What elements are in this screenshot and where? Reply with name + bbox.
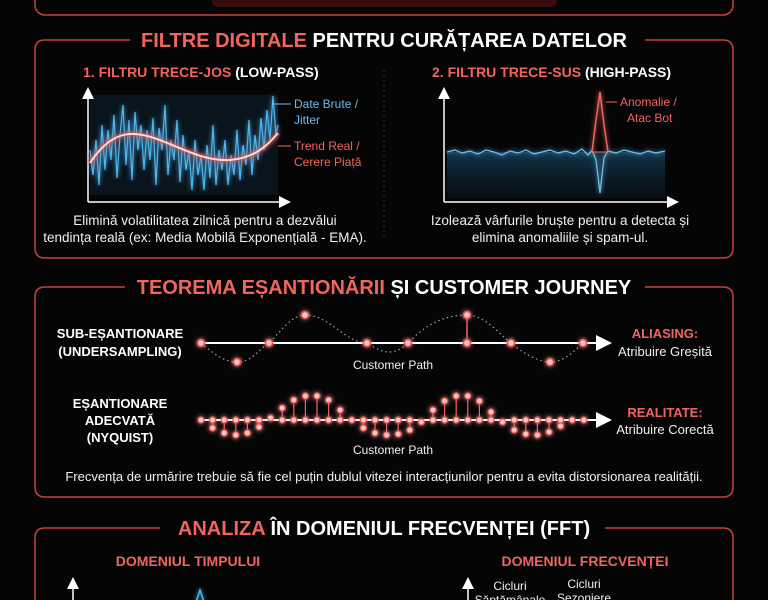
- chart: low-pass: Cerere Piață: [294, 155, 362, 169]
- heading: filters: FILTRE DIGITALE PENTRU CURĂȚAREA DATELOR: [141, 29, 628, 52]
- panel: sampling theorem: Atribuire Greșită: [618, 344, 713, 359]
- diagram: undersampling: Customer Path: [353, 358, 433, 372]
- chart: frequency domain (cropped): Cicluri: [493, 579, 527, 593]
- chart: high-pass: Anomalie /: [620, 95, 677, 109]
- label: nyquist: EȘANTIONARE: [73, 396, 168, 411]
- caption: low-pass: Elimină volatilitatea zilnică pentru a dezvălui: [73, 213, 337, 228]
- subheading: frequency domain: DOMENIUL FRECVENȚEI: [502, 553, 668, 569]
- callout: aliasing: ALIASING:: [632, 326, 698, 341]
- panel: sampling theorem: (NYQUIST): [87, 430, 153, 445]
- callout: reality: REALITATE:: [627, 405, 703, 420]
- panel: digital filters: [35, 29, 733, 258]
- panel: digital filters: elimina anomaliile și spam-ul.: [472, 230, 648, 245]
- panel: FFT: [35, 516, 733, 600]
- subheading: high-pass: 2. FILTRU TRECE-SUS (HIGH-PASS): [432, 64, 671, 80]
- panel: sampling theorem: Atribuire Corectă: [616, 422, 715, 437]
- subheading: low-pass: 1. FILTRU TRECE-JOS (LOW-PASS): [83, 64, 319, 80]
- heading: FFT: ANALIZA ÎN DOMENIUL FRECVENȚEI (FFT): [178, 516, 590, 540]
- diagram: nyquist: Customer Path: [353, 443, 433, 457]
- panel: sampling theorem: [35, 276, 733, 497]
- panel: sampling theorem: (UNDERSAMPLING): [58, 344, 182, 359]
- chart: low-pass: [88, 90, 362, 202]
- chart: frequency domain (cropped): [468, 577, 611, 600]
- chart: low-pass: Date Brute /: [294, 97, 359, 111]
- diagram: nyquist: [198, 393, 608, 457]
- chart: high-pass: [444, 90, 677, 202]
- chart: low-pass: Jitter: [294, 113, 320, 127]
- caption: sampling: Frecvența de urmărire trebuie să fie cel puțin dublul vitezei interacțiunilor pentru a evita distorsionarea realității.: [65, 469, 703, 484]
- label: undersampling: SUB-EȘANTIONARE: [57, 326, 184, 341]
- chart: time domain (cropped): [73, 580, 205, 600]
- heading: sampling: TEOREMA EȘANTIONĂRII ȘI CUSTOMER JOURNEY: [137, 276, 632, 299]
- panel: sampling theorem: ADECVATĂ: [85, 413, 156, 428]
- panel: digital filters: tendința reală (ex: Media Mobilă Exponențială - EMA).: [43, 230, 367, 245]
- chart: high-pass: Atac Bot: [627, 111, 673, 125]
- chart: frequency domain (cropped): Cicluri: [567, 577, 601, 591]
- diagram: undersampling: [198, 312, 608, 372]
- caption: high-pass: Izolează vârfurile bruște pentru a detecta și: [431, 213, 689, 228]
- subheading: time domain: DOMENIUL TIMPULUI: [116, 553, 260, 569]
- chart: low-pass: Trend Real /: [294, 139, 360, 153]
- panel: top (cropped): [35, 0, 733, 15]
